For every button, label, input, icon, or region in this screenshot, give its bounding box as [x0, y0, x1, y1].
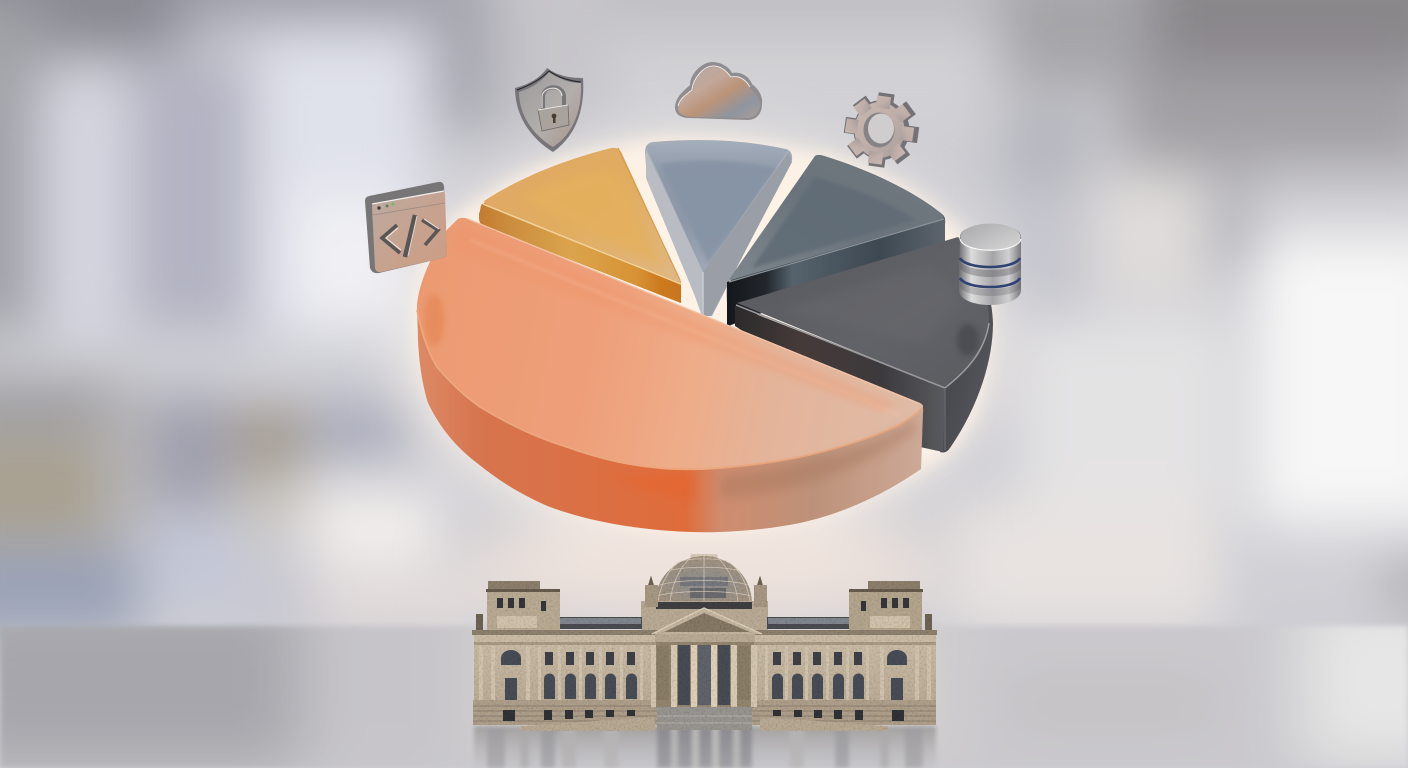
code glyphs: [382, 215, 439, 257]
reflective floor: [0, 624, 1408, 768]
charcoal front face: [735, 306, 945, 452]
charcoal outer side: [940, 238, 993, 452]
plinth: [473, 700, 936, 725]
gear hole: [864, 112, 894, 148]
upper rectangular windows: [545, 652, 862, 665]
right tower: [849, 581, 932, 636]
warm glow behind the pie: [400, 138, 1000, 620]
icon: shield with padlock: [515, 68, 583, 152]
segment: large orange: [417, 218, 923, 532]
roof glass: [542, 617, 865, 629]
orange top rim: [417, 310, 922, 469]
building reflection: [470, 726, 940, 768]
segment: charcoal: [735, 237, 993, 452]
dome: [655, 554, 752, 602]
icon: database stack: [959, 224, 1021, 305]
central portico: [651, 634, 757, 708]
segment: yellow amber: [479, 148, 681, 303]
arched windows: [501, 650, 907, 700]
main facade: [474, 633, 936, 708]
segment: blue-grey: [645, 140, 792, 316]
stairs: [657, 707, 752, 730]
orange inner band highlight: [470, 240, 900, 415]
padlock: [538, 87, 569, 131]
orange top face: [417, 218, 923, 469]
charcoal top face: [737, 237, 989, 388]
pediment: [652, 608, 762, 634]
icon: gear: [844, 92, 919, 168]
basement windows: [503, 710, 904, 721]
drum and side pinnacles: [641, 575, 768, 631]
orange side wall: [417, 218, 923, 532]
icon: cloud: [675, 62, 762, 120]
segment: dark slate: [727, 155, 945, 326]
cornice: [472, 630, 937, 645]
orange side shading: [720, 420, 915, 498]
icon: code window: [365, 182, 447, 273]
ramps: [521, 717, 888, 731]
Reichstag building: [472, 554, 937, 731]
left tower: [476, 581, 560, 636]
pilasters: [479, 646, 931, 700]
pie chart: [417, 140, 993, 532]
